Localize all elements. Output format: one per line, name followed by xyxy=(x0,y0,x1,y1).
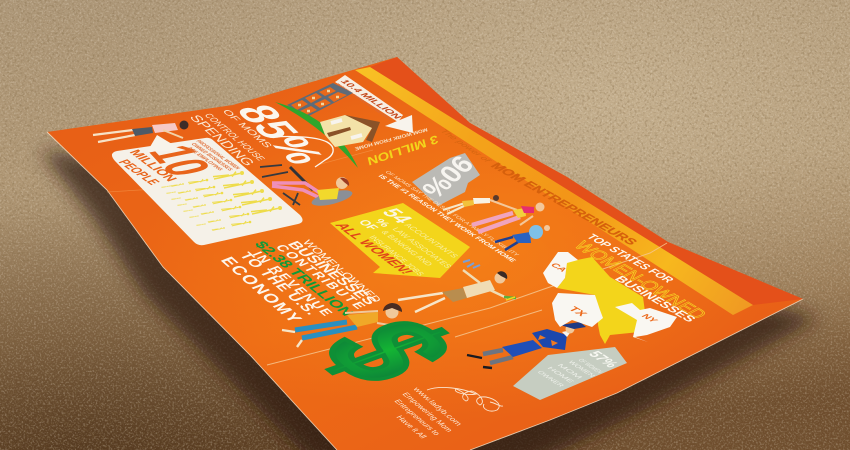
illustration: woman in blue pants xyxy=(282,303,402,347)
text: women-owned businesses contribute xyxy=(216,239,384,325)
text: women-owned businesses contribute: WOMEN-OWNED xyxy=(299,239,384,304)
54 percent figure: 54 xyxy=(376,206,419,226)
heading: top states for women-owned businesses: BUSINESSES xyxy=(612,274,699,324)
panel: 57 percent house xyxy=(513,347,627,400)
title text: The power of xyxy=(439,128,493,164)
text: website and tagline: www.ladyb.com xyxy=(410,386,464,427)
57 percent description: OWNER xyxy=(535,370,565,388)
all women: ALL WOMEN! xyxy=(331,220,416,276)
title text: MOM ENTREPRENEURS xyxy=(488,161,640,247)
text: 90 percent explanation: OF MOMS SAY THE DESIRE FOR A FAMILY FLEXIBILITY xyxy=(383,170,519,257)
illustration: mom at desk xyxy=(260,165,354,209)
small label: ARE EMPLOYING xyxy=(185,147,224,172)
text: women-owned businesses contribute: IN REVENUE xyxy=(249,250,336,318)
small label: PROFESSIONAL WOMEN xyxy=(194,140,241,170)
text: women-owned businesses contribute: ECONOMY xyxy=(216,255,306,325)
arrow: white pointer xyxy=(385,115,413,133)
57 percent description: MOM xyxy=(555,363,584,380)
heading: top states for women-owned businesses: WOMEN-OWNED xyxy=(569,239,711,322)
54 percent figure: % xyxy=(371,218,392,229)
arrow: up triangle xyxy=(147,135,182,152)
text: women-owned businesses contribute: BUSINESSES xyxy=(283,240,380,307)
panel: 57 percent house: 57% xyxy=(584,349,622,370)
57 percent description: WOMEN xyxy=(566,360,596,378)
map: top states xyxy=(543,252,677,344)
illustration: man with green item xyxy=(398,260,516,312)
icon: green dollar sign: $ xyxy=(287,303,491,398)
illustration: woman in blue suit xyxy=(467,322,586,368)
54 percent figure xyxy=(355,206,419,232)
stat: 3 million mom work from home: 3 MILLION xyxy=(366,132,440,168)
54 percent figure: OF xyxy=(355,218,382,232)
stat: 3 million mom work from home: MOM WORK FROM HOME xyxy=(354,126,428,151)
state: Texas: TX xyxy=(565,306,589,318)
small label xyxy=(185,140,241,172)
text: women-owned businesses contribute: $2.38 TRILLION xyxy=(250,240,356,318)
stat: 85 percent: OF MOMS xyxy=(219,109,275,149)
text: women-owned businesses contribute: CONTRIBUTE xyxy=(272,243,370,311)
panel: 54 percent callout xyxy=(330,203,470,278)
small label: OWNED BUSINESSES xyxy=(189,143,233,171)
stat: 85 percent: 85% xyxy=(225,101,337,167)
signature xyxy=(427,387,503,411)
57 percent description: HOME xyxy=(545,366,576,384)
stat: 85 percent: SPENDING xyxy=(186,113,258,167)
text: website and tagline: Entrepreneurs to xyxy=(392,398,442,437)
illustration: woman lying, top left xyxy=(93,120,188,142)
stat: 85 percent xyxy=(186,101,337,167)
poster sheet xyxy=(47,57,803,450)
text: women-owned businesses contribute: TO THE U.S. xyxy=(235,251,321,317)
stat: 10.4 million: WOMEN-OWNED BUSINESSES xyxy=(335,83,393,120)
decorative white cable loop xyxy=(270,137,333,167)
57 percent description xyxy=(535,358,604,388)
panel: 10 million people card xyxy=(112,135,303,245)
title banner xyxy=(355,67,753,315)
yellow people pictogram xyxy=(161,171,282,231)
state: California: CA xyxy=(548,262,570,273)
job list: ACCOUNTANTS xyxy=(402,223,460,259)
heading: top states for women-owned businesses: TOP STATES FOR xyxy=(584,232,677,284)
illustration: green hill xyxy=(275,102,358,168)
stat: 3 million mom work from home xyxy=(354,126,440,168)
job list: INSURANCE JOBS xyxy=(367,235,426,277)
illustration: office building xyxy=(287,83,353,117)
job list: & BANKING AND xyxy=(379,230,434,267)
stat: 10.4 million: 10.4 MILLION xyxy=(337,79,403,120)
job list xyxy=(367,223,460,277)
57 percent description: OF WOMEN xyxy=(576,358,604,374)
text: website and tagline: Have it All xyxy=(394,414,429,440)
text: 90 percent explanation: IS THE #1 REASON THEY WORK FROM HOME xyxy=(376,173,518,263)
title text xyxy=(439,128,640,247)
million people label: MILLION xyxy=(126,148,180,183)
job list: LAW ASSOCIATES xyxy=(390,227,454,269)
fold lines xyxy=(267,243,667,365)
badge: 90 percent: 90% xyxy=(415,150,479,203)
illustration: house xyxy=(320,115,380,147)
poster drop shadow xyxy=(40,150,820,450)
illustration: three women xyxy=(443,195,550,250)
stat: 85 percent: CONTROL HOUSE xyxy=(201,113,267,162)
state: New York: NY xyxy=(639,313,661,324)
big number 10: 10 xyxy=(135,141,223,181)
million people label: PEOPLE xyxy=(115,158,163,186)
text: website and tagline: Empowering Mom xyxy=(400,391,455,433)
